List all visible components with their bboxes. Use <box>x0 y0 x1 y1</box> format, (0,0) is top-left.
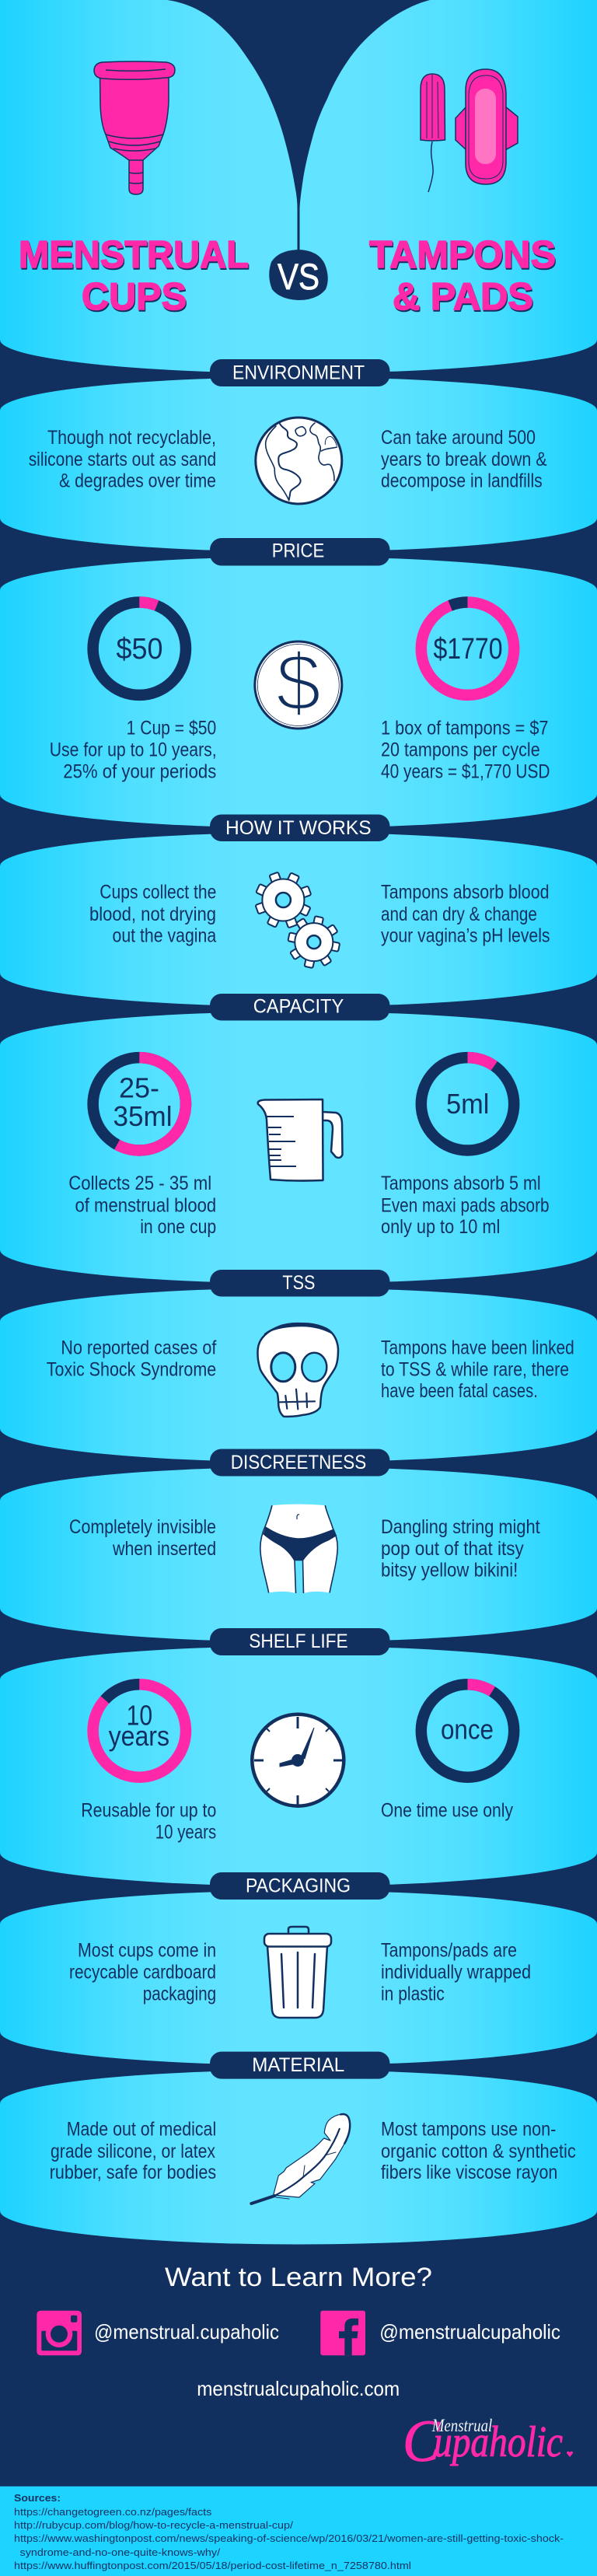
text: cups tss: Toxic Shock Syndrome <box>47 1358 216 1380</box>
icon: skull <box>257 1323 338 1417</box>
text: tampons material: organic cotton & synthetic <box>381 2141 576 2162</box>
text: cups environment: Though not recyclable, <box>47 427 216 449</box>
text: cups material: grade silicone, or latex <box>51 2141 215 2162</box>
text: tampon price: 1 box of tampons = $7 <box>381 717 549 739</box>
section: capacity <box>0 994 597 1283</box>
section: discreetness <box>0 1449 597 1642</box>
icon: globe <box>256 418 342 504</box>
section: environment <box>0 359 597 552</box>
icon: menstrual cup <box>94 61 175 194</box>
text: tampon price: 20 tampons per cycle <box>381 739 540 760</box>
chart: tampon shelf life donut: once <box>441 1713 494 1745</box>
heading: tss <box>210 1270 390 1297</box>
text: pads environment <box>381 427 547 491</box>
heading: capacity <box>210 994 390 1020</box>
text: tampons material: Most tampons use non- <box>381 2118 556 2140</box>
badge: vs <box>269 250 328 300</box>
text: cups how it works: blood, not drying <box>89 904 216 925</box>
chart: tampon capacity donut <box>421 1057 514 1151</box>
title: tampons and pads: TAMPONS <box>369 234 556 276</box>
heading: discreetness: DISCREETNESS <box>231 1452 366 1473</box>
icon: facebook <box>320 2311 365 2355</box>
heading: capacity: CAPACITY <box>253 996 344 1018</box>
text: cup price: 1 Cup = $50 <box>127 717 216 739</box>
text: cup capacity <box>68 1173 216 1238</box>
chart: cup capacity donut: 35ml <box>113 1100 173 1132</box>
icon: trash can <box>264 1927 331 2018</box>
title: menstrual cups <box>19 234 249 318</box>
text: cup capacity: in one cup <box>140 1216 216 1238</box>
text: cups how it works: Cups collect the <box>100 882 216 904</box>
heading: price: PRICE <box>272 540 324 562</box>
text: cups environment <box>29 427 216 491</box>
text: cup shelf life: Reusable for up to <box>81 1800 216 1822</box>
text: tampons material <box>381 2118 576 2183</box>
heading: shelf life: SHELF LIFE <box>249 1631 348 1652</box>
text: tampons tss <box>381 1337 574 1402</box>
text: cups packaging: Most cups come in <box>78 1939 216 1961</box>
badge: vs: VS <box>278 256 319 297</box>
text: cups material: rubber, safe for bodies <box>50 2162 216 2183</box>
chart: cup price donut <box>93 602 186 695</box>
icon: sanitary pad <box>456 69 518 184</box>
chart: cup shelf life donut: years <box>109 1720 169 1752</box>
text: tampon price: 40 years = $1,770 USD <box>381 760 550 782</box>
chart: tampon price donut <box>407 588 528 709</box>
text: pads environment: years to break down & <box>381 449 547 470</box>
chart: cup shelf life donut <box>74 1665 205 1796</box>
text: tampons how it works <box>381 882 550 947</box>
footer: want to learn more: Want to Learn More? <box>165 2263 432 2292</box>
title: tampons and pads <box>369 234 556 318</box>
icon: bikini body <box>260 1504 337 1593</box>
text: pads discreetness: Dangling string might <box>381 1516 540 1538</box>
text: cups how it works: out the vagina <box>112 925 216 947</box>
text: tampons packaging: individually wrapped <box>381 1961 531 1983</box>
section: price <box>0 538 597 828</box>
panel: hero header <box>0 0 597 373</box>
text: cups tss: No reported cases of <box>61 1337 216 1358</box>
text: cups discreetness: when inserted <box>112 1538 216 1560</box>
panel: sources: Sources: <box>14 2492 61 2504</box>
text: tampon capacity <box>381 1173 549 1238</box>
text: tampons how it works: Tampons absorb blood <box>381 882 549 904</box>
section: packaging <box>0 1872 597 2065</box>
text: pads environment: decompose in landfills <box>381 470 543 491</box>
section: how it works <box>0 815 597 1006</box>
heading: material <box>210 2052 390 2079</box>
text: tampons how it works: your vagina’s pH levels <box>381 925 550 947</box>
icon: gears <box>256 872 340 968</box>
text: cups packaging: recycable cardboard <box>69 1961 216 1983</box>
text: pads discreetness: bitsy yellow bikini! <box>381 1560 518 1582</box>
text: cup capacity: Collects 25 - 35 ml <box>68 1173 211 1194</box>
chart: tampon capacity donut: 5ml <box>446 1088 489 1120</box>
chart: cup capacity donut: 25- <box>119 1072 159 1104</box>
panel: sources: http://rubycup.com/blog/how-to-recycle-a-menstrual-cup/ <box>14 2519 293 2531</box>
text: cups packaging <box>69 1939 216 2005</box>
logo: menstrual cupaholic: Menstrual <box>431 2416 492 2435</box>
text: cups environment: & degrades over time <box>59 470 216 491</box>
icon: dollar coin <box>255 638 342 729</box>
text: cups tss <box>47 1337 216 1380</box>
heading: environment: ENVIRONMENT <box>232 362 365 384</box>
icon: clock <box>252 1714 344 1806</box>
text: tampons packaging: Tampons/pads are <box>381 1939 517 1961</box>
text: cups material <box>50 2118 216 2183</box>
text: cup capacity: of menstrual blood <box>75 1195 216 1217</box>
icon: tampon <box>421 74 445 192</box>
text: pads discreetness <box>381 1516 540 1582</box>
icon: measuring jug <box>258 1099 342 1181</box>
text: cups discreetness <box>69 1516 216 1560</box>
text: tampon capacity: Tampons absorb 5 ml <box>381 1173 541 1194</box>
title: menstrual cups: MENSTRUAL <box>19 234 249 276</box>
heading: how it works <box>210 815 390 841</box>
text: tampons material: fibers like viscose rayon <box>381 2162 557 2183</box>
text: cup price: Use for up to 10 years, <box>50 739 217 760</box>
text: instagram handle: @menstrual.cupaholic <box>94 2320 279 2344</box>
heading: environment <box>210 359 390 386</box>
section: shelf life <box>0 1628 597 1886</box>
panel: sources: https://changetogreen.co.nz/pages/facts <box>14 2506 212 2518</box>
text: pads environment: Can take around 500 <box>381 427 536 449</box>
text: tampon shelf life: One time use only <box>381 1800 513 1822</box>
text: cups material: Made out of medical <box>67 2118 216 2140</box>
panel: sources: syndrome-and-no-one-quite-knows-why/ <box>20 2546 221 2558</box>
text: cup price: 25% of your periods <box>63 760 216 782</box>
chart: cup shelf life donut: 10 <box>127 1700 152 1731</box>
text: tampon price <box>381 717 550 782</box>
text: cups how it works <box>89 882 216 947</box>
panel: sources: https://www.huffingtonpost.com/2015/05/18/period-cost-lifetime_n_7258780.html <box>14 2560 411 2571</box>
chart: tampon shelf life donut <box>421 1684 514 1777</box>
heading: packaging: PACKAGING <box>246 1875 351 1896</box>
chart: tampon price donut: $1770 <box>434 633 502 666</box>
text: tampons tss: to TSS & while rare, there <box>381 1358 569 1380</box>
heading: tss: TSS <box>282 1272 315 1294</box>
icon: instagram <box>37 2311 82 2355</box>
title: tampons and pads: & PADS <box>393 276 533 318</box>
section: tss <box>0 1270 597 1462</box>
text: facebook handle: @menstrualcupaholic <box>379 2320 560 2344</box>
text: tampons packaging <box>381 1939 531 2005</box>
text: cups discreetness: Completely invisible <box>69 1516 216 1538</box>
text: tampons tss: have been fatal cases. <box>381 1380 538 1402</box>
heading: shelf life <box>210 1628 390 1655</box>
logo: menstrual cupaholic: upaholic <box>434 2418 563 2466</box>
text: cups environment: silicone starts out as sand <box>29 449 216 470</box>
text: tampons packaging: in plastic <box>381 1983 445 2005</box>
logo: menstrual cupaholic <box>403 2409 573 2474</box>
panel: sources <box>0 2487 597 2576</box>
heading: material: MATERIAL <box>252 2054 344 2076</box>
text: tampon capacity: only up to 10 ml <box>381 1216 500 1238</box>
chart: cup price donut: $50 <box>117 633 163 666</box>
logo: menstrual cupaholic: C <box>403 2409 441 2474</box>
chart: cup capacity donut <box>93 1057 186 1151</box>
icon: dollar coin: $ <box>276 638 321 729</box>
text: pads discreetness: pop out of that itsy <box>381 1538 524 1560</box>
heading: packaging <box>210 1872 390 1900</box>
text: tampons how it works: and can dry & change <box>381 904 537 925</box>
text: cup shelf life <box>81 1800 216 1844</box>
title: menstrual cups: CUPS <box>82 276 187 318</box>
heading: discreetness <box>210 1449 390 1476</box>
panel: sources: https://www.washingtonpost.com/news/speaking-of-science/wp/2016/03/21/women-are-still-getting-toxic-shock- <box>14 2532 564 2544</box>
heading: price <box>210 538 390 566</box>
heading: how it works: HOW IT WORKS <box>225 817 372 839</box>
text: website: menstrualcupaholic.com <box>197 2377 400 2400</box>
section: material <box>0 2052 597 2244</box>
text: cups packaging: packaging <box>143 1983 216 2005</box>
text: cup shelf life: 10 years <box>155 1822 216 1844</box>
text: tampon capacity: Even maxi pads absorb <box>381 1195 549 1217</box>
icon: feather <box>251 2114 350 2204</box>
text: cup price <box>50 717 217 782</box>
